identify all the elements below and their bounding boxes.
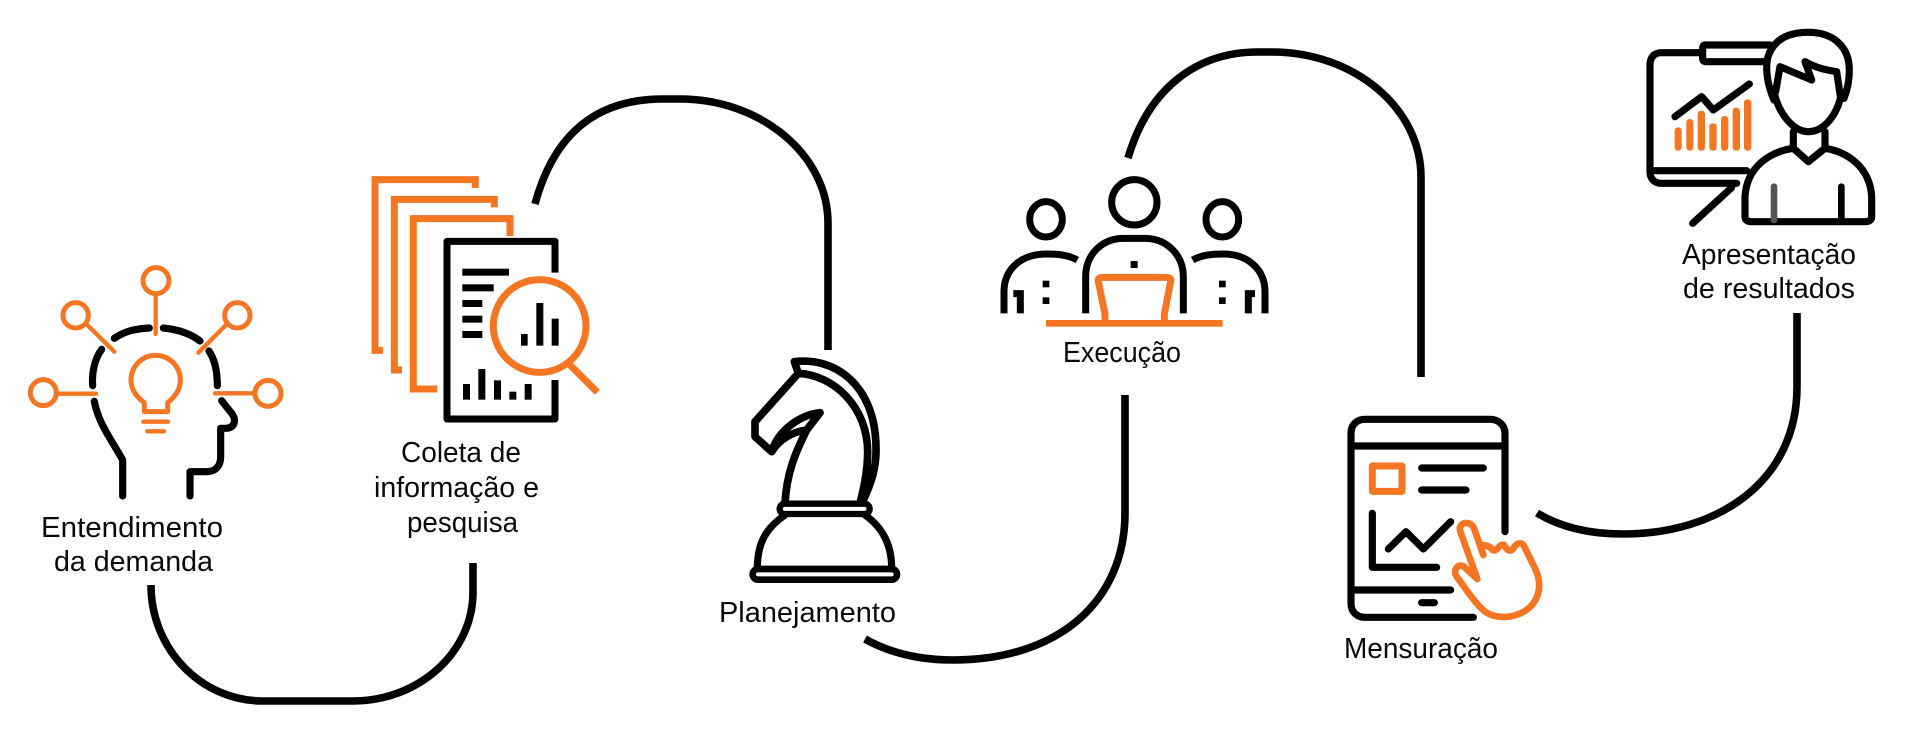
connector: Entendimento to Coleta — [151, 563, 473, 701]
label: Coleta de informação e pesquisa: pesquisa — [407, 507, 519, 539]
icon: team around a laptop — [1004, 180, 1265, 327]
label: Apresentação de resultados: Apresentação — [1682, 239, 1856, 271]
step 1: Entendimento da demanda — [30, 268, 281, 578]
label: Coleta de informação e pesquisa: informação e — [374, 472, 539, 504]
icon: chess knight — [753, 361, 897, 580]
step 3: Planejamento — [719, 361, 897, 629]
icon: documents with magnifier — [375, 180, 597, 419]
icon: presenter with chart board — [1650, 32, 1872, 223]
label: Coleta de informação e pesquisa: Coleta de — [401, 437, 521, 469]
label: Planejamento: Planejamento — [719, 597, 896, 629]
icon: head with light bulb — [30, 268, 281, 496]
icon: tablet with touching hand — [1351, 419, 1539, 617]
connector: Execução to Mensuração — [1128, 52, 1421, 377]
label: Entendimento da demanda: Entendimento — [41, 512, 223, 544]
label: Apresentação de resultados: de resultados — [1683, 273, 1855, 305]
label: Mensuração: Mensuração — [1344, 633, 1498, 665]
step 4: Execução — [1004, 180, 1265, 369]
step 5: Mensuração — [1344, 419, 1539, 665]
label: Execução: Execução — [1063, 337, 1181, 369]
step 2: Coleta de informação e pesquisa — [374, 180, 597, 539]
connector: Mensuração to Apresentação — [1537, 313, 1797, 534]
step 6: Apresentação de resultados — [1650, 32, 1872, 305]
label: Entendimento da demanda: da demanda — [54, 546, 214, 578]
connector: Planejamento to Execução — [865, 395, 1125, 660]
connector: Coleta to Planejamento — [535, 99, 828, 350]
